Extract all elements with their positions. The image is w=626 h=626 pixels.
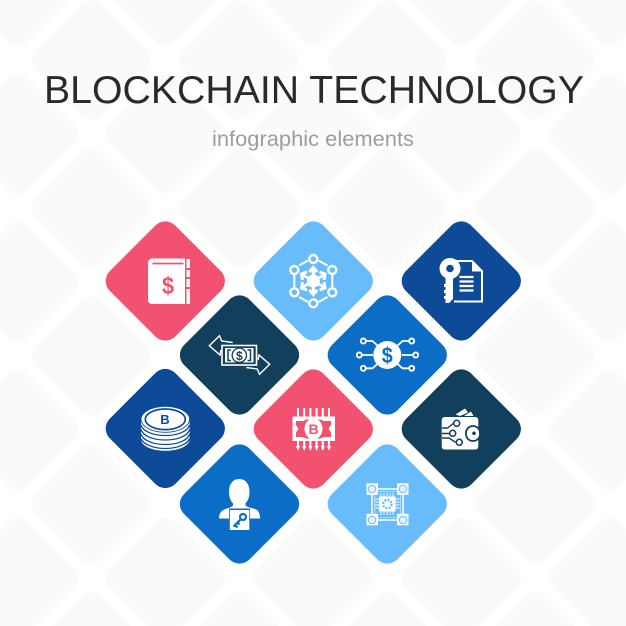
panel: key document	[396, 216, 527, 346]
subtitle: infographic elements	[212, 128, 414, 151]
panel: coin stack	[100, 363, 231, 494]
panel: network hub	[248, 216, 379, 346]
panel: crypto network	[322, 290, 453, 420]
panel: chip framework	[322, 439, 453, 569]
panel: user key	[174, 439, 305, 569]
panel: money exchange	[174, 290, 305, 420]
panel: bitcoin chip	[248, 364, 379, 494]
icon: key and document	[440, 258, 482, 303]
icon: circuit wallet	[442, 408, 480, 450]
panel: ledger book	[100, 216, 231, 346]
icon: dollar ledger: $	[162, 272, 175, 300]
icon: person with key	[219, 479, 260, 530]
icon: currency exchange: $	[236, 349, 243, 363]
icon: bitcoin processor: B	[308, 421, 319, 437]
icon: bitcoin coins: B	[160, 412, 170, 427]
title: BLOCKCHAIN TECHNOLOGY	[44, 69, 584, 112]
panel: digital wallet	[396, 364, 527, 494]
icon: dollar circuit: $	[382, 343, 393, 368]
icon: snowflake network	[290, 255, 336, 307]
icon: gear chip	[366, 483, 408, 525]
